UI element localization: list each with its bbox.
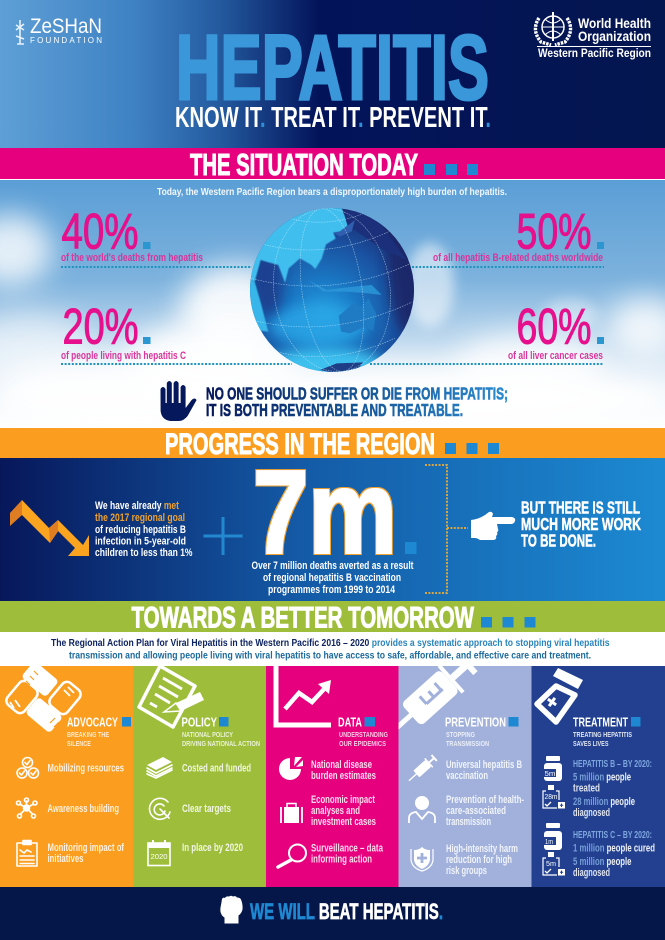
heading: data: OUR EPIDEMICS [339,739,386,748]
item: mobilizing resources: Mobilizing resources [48,762,124,774]
heading: advocacy [67,714,131,748]
icon: pie chart [279,757,303,780]
stat: 40%: 40% [62,204,138,260]
heading: data: UNDERSTANDING [339,730,388,739]
heading: policy: NATIONAL POLICY [182,730,233,739]
text: hepatitis B targets: diagnosed [573,807,610,819]
item: harm reduction: reduction for high [446,854,512,866]
item: national disease [311,759,376,782]
icon: 5m checklist: 5m [546,859,556,868]
banner: progress in the region: PROGRESS IN THE REGION [165,428,435,461]
item: monitoring impact: initiatives [48,853,84,865]
item: harm reduction: High-intensity harm [446,843,518,855]
heading: treatment: SAVES LIVES [573,739,608,748]
logo: World Health Organization: Western Pacific Region [538,48,651,60]
icon: 28m checklist [543,785,565,808]
panel: header [0,0,665,148]
icon: medicine bottle [537,668,583,722]
stat: 20%: 20% [62,298,138,354]
text: action plan introduction: transmission and allowing people living with viral hepatitis to have access to safe, affordable, and effective care and treatment. [69,650,591,662]
panel: policy [134,666,266,887]
icon: falling arrow [10,500,89,556]
icon: clipboard [17,840,37,866]
heading: policy: POLICY [182,714,217,730]
closing message: WE WILL BEAT HEPATITIS. [250,899,443,924]
icon: doctor [409,796,435,823]
text: hepatitis B targets: 5 million people [573,772,631,784]
item: health-care transmission [446,794,524,828]
text: more work [521,498,641,550]
banner: progress in the region [0,428,665,461]
stat: 20%: of people living with hepatitis C [61,350,186,362]
heading: data [338,714,388,748]
stat: 60%: 60% [516,298,592,354]
stat: 7m: 7m [253,446,397,579]
item: awareness building: Awareness building [48,803,119,815]
item: health-care transmission: transmission [446,816,491,828]
logo: Zeshan Foundation: ZeSHaN [30,15,102,38]
icon: 5m bottle: 5m [544,769,556,778]
icon: rising chart [276,664,331,725]
text: hepatitis B targets: 28 million people [573,796,635,808]
logo: World Health Organization: World Health [578,15,651,31]
icon: calendar [148,840,170,866]
icon: briefcase [281,804,302,823]
item: surveillance: informing action [311,854,372,866]
icon: raised fist [220,896,243,924]
panel: treatment [532,666,665,887]
dotted leader lines [61,267,604,364]
title: HEPATITIS [176,17,489,119]
text: more work: TO BE DONE. [521,530,596,550]
text: regional goal: infection in 5-year-old [95,536,186,548]
icon: target [149,798,170,819]
heading: treatment: TREATING HEPATITIS [573,730,632,739]
text: deaths averted [252,560,414,596]
item: national disease: National disease [311,759,372,771]
item: surveillance: Surveillance – data [311,842,384,854]
item: universal vaccination: vaccination [446,770,488,782]
icon: joined hands [5,666,82,732]
item: monitoring impact [48,842,124,865]
item: health-care transmission: Prevention of health- [446,794,524,806]
heading: policy: DRIVING NATIONAL ACTION [182,739,260,748]
heading: prevention: STOPPING [446,730,475,739]
icon: document and pen [139,666,204,727]
heading: data: DATA [338,714,362,730]
text: hepatitis C targets: diagnosed [573,867,610,879]
item: national disease: burden estimates [311,770,376,782]
stat: 60%: of all liver cancer cases [508,350,603,362]
heading: treatment [573,714,640,748]
text: hepatitis B targets: treated [573,782,600,794]
item: economic impact: Economic impact [311,794,375,806]
heading: policy [182,714,260,748]
text: deaths averted: programmes from 1999 to 2014 [268,584,396,596]
heading: advocacy: ADVOCACY [67,714,118,730]
icon: syringe [398,666,478,730]
heading: prevention: PREVENTION [445,714,506,730]
item: universal vaccination [446,759,522,782]
heading: advocacy: SILENCE [67,739,91,748]
icon: money stack [147,757,172,778]
item: economic impact [311,794,376,828]
text: deaths averted: Over 7 million deaths averted as a result [252,560,414,572]
tagline: KNOW IT. TREAT IT. PREVENT IT. [175,102,491,134]
stat: 40%: of the world's deaths from hepatitis [61,252,203,264]
logo: Zeshan Foundation [16,15,102,45]
sky background with clouds [0,180,665,400]
icon: 28m checklist: 28m [544,792,558,801]
logo: Zeshan Foundation: FOUNDATION [30,36,102,45]
logo: World Health Organization: Organization [578,28,651,44]
statement [206,384,508,420]
panel: situation today [0,179,665,433]
panel: footer [0,887,665,940]
statement: IT IS BOTH PREVENTABLE AND TREATABLE. [206,400,463,420]
item: costed and funded: Costed and funded [182,762,251,774]
icon: plus [204,517,242,555]
stat: 50%: of all hepatitis B-related deaths worldwide [433,252,603,264]
icon: stop hand [160,381,197,421]
icon: 1m bottle: 1m [545,837,553,846]
banner: towards a better tomorrow: TOWARDS A BETTER TOMORROW [132,602,474,634]
stat: 50%: 50% [516,204,592,260]
text: regional goal [95,500,193,559]
globe [250,208,414,372]
statement: NO ONE SHOULD SUFFER OR DIE FROM HEPATITIS; [206,384,508,404]
text: regional goal: the 2017 regional goal [95,512,185,524]
item: economic impact: investment cases [311,816,376,828]
item: harm reduction [446,843,518,877]
text: regional goal: of reducing hepatitis B [95,524,186,536]
text: regional goal: children to less than 1% [95,547,193,559]
icon: 1m bottle [544,823,562,850]
text: action plan introduction [0,632,665,666]
banner: the situation today [0,147,665,182]
text: deaths averted: of regional hepatitis B vaccination [263,572,401,584]
text: hepatitis B targets [573,759,652,819]
panel: progress [0,446,665,601]
heading: treatment: TREATMENT [573,714,628,730]
icon: 5m checklist [543,852,565,876]
text: hepatitis C targets [573,830,655,879]
panel: advocacy [0,661,134,887]
icon: shield [411,847,433,871]
banner: the situation today: THE SITUATION TODAY [190,147,418,182]
icon: network [16,798,37,818]
icon: 5m bottle [544,756,562,781]
item: health-care transmission: care-associated [446,805,506,817]
panel: prevention [398,666,532,887]
item: surveillance [311,842,384,866]
stat: 40% [61,204,203,264]
icon: magnifier [278,844,306,867]
item: universal vaccination: Universal hepatitis B [446,759,522,771]
dotted bracket [425,465,468,593]
icon: small syringe [405,753,439,785]
panel: data [266,664,398,887]
icon: calendar: 2020 [150,854,168,861]
heading: prevention: TRANSMISSION [446,739,489,748]
icon: checks [17,758,38,778]
heading: advocacy: BREAKING THE [67,730,109,739]
text: action plan introduction: The Regional Action Plan for Viral Hepatitis in the Western Pacific 2016 – 2020 provides a systematic approach to stopping viral hepatitis [51,638,610,649]
intro sentence: Today, the Western Pacific Region bears a disproportionately high burden of hepatitis. [157,187,507,198]
text: regional goal: We have already met [95,500,179,512]
logo: World Health Organization [535,12,651,60]
item: monitoring impact: Monitoring impact of [48,842,124,854]
stat: 50% [433,204,604,264]
item: harm reduction: risk groups [446,865,487,877]
item: economic impact: analyses and [311,805,360,817]
icon: pointing hand [471,512,515,540]
text: hepatitis C targets: 5 million people [573,856,632,868]
heading: prevention [445,714,518,748]
item: clear targets: Clear targets [182,803,231,815]
item: in place by 2020: In place by 2020 [182,842,243,854]
